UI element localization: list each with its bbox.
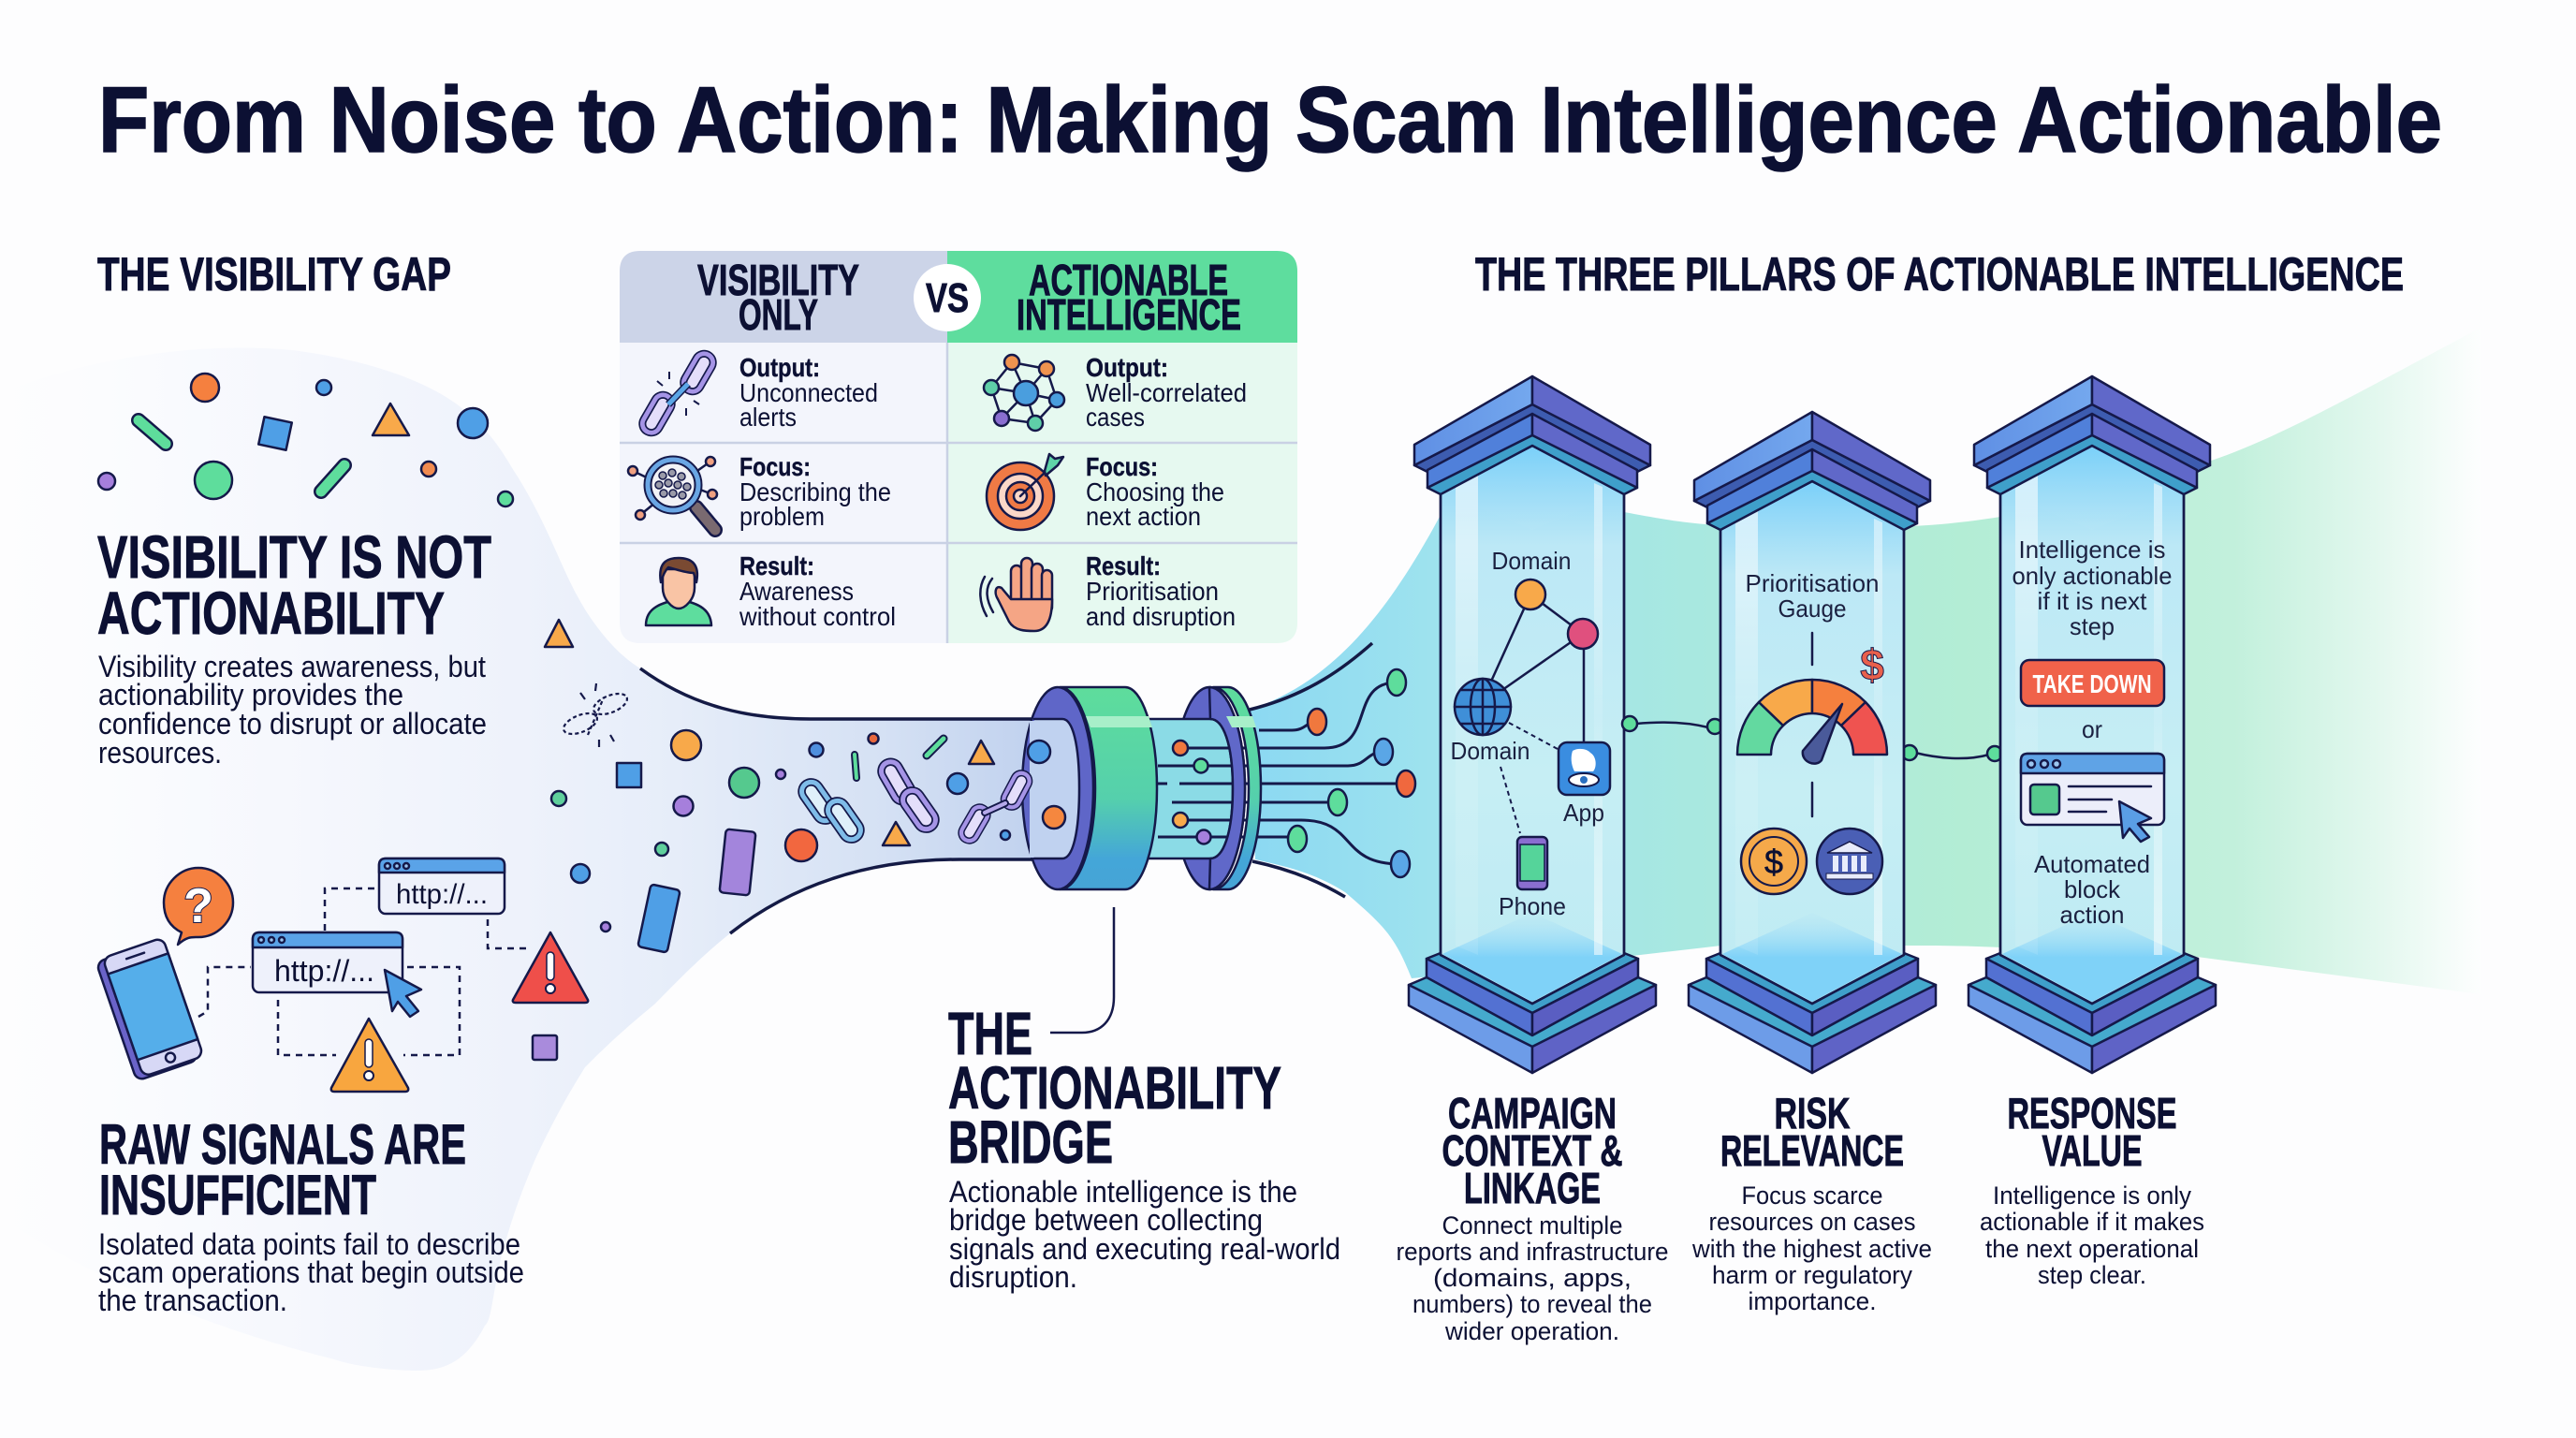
label: prioritisation gauge: Prioritisation xyxy=(1745,569,1880,597)
text: bridge description: Actionable intelligence is the xyxy=(949,1175,1297,1209)
button: take down: TAKE DOWN xyxy=(2033,669,2151,698)
text: campaign description: Connect multiple xyxy=(1442,1211,1623,1240)
heading: response value: RESPONSE xyxy=(2007,1089,2177,1137)
heading: the actionability bridge: BRIDGE xyxy=(948,1108,1113,1176)
panel: visibility vs actionable comparison xyxy=(620,251,1297,643)
icon: browser window front: http://... xyxy=(274,954,374,988)
scattered noise shapes xyxy=(98,374,1010,1060)
icon: question speech bubble xyxy=(164,868,233,945)
icon: browser window top xyxy=(379,858,505,914)
label: automated block action: Automated xyxy=(2034,850,2150,878)
heading: visibility is not actionability: VISIBILITY IS NOT xyxy=(97,523,491,591)
text: risk description: importance. xyxy=(1749,1287,1876,1315)
label: or: or xyxy=(2082,715,2102,743)
text: raw signals description: the transaction. xyxy=(98,1284,287,1317)
label: automated block action: action xyxy=(2059,901,2125,929)
pillar 1: campaign context and linkage xyxy=(1409,376,1656,1073)
heading: visibility is not actionability: ACTIONABILITY xyxy=(97,580,445,647)
text: risk description: resources on cases xyxy=(1709,1208,1915,1236)
label: phone: Phone xyxy=(1499,892,1566,920)
text: response description: the next operational xyxy=(1985,1235,2199,1263)
icon: browser window top: http://... xyxy=(396,879,488,910)
icon: browser window front xyxy=(253,932,402,992)
connections of entity graph xyxy=(1490,594,1584,833)
label: prioritisation gauge xyxy=(1745,569,1880,623)
icon: dollar sign: $ xyxy=(1860,640,1884,689)
label: prioritisation gauge: Gauge xyxy=(1778,594,1846,623)
panel: visibility vs actionable comparison: Focus: xyxy=(1086,452,1158,481)
tube outline xyxy=(640,643,1372,933)
panel: visibility vs actionable comparison: alerts xyxy=(739,403,797,432)
text: campaign description: numbers) to reveal the xyxy=(1412,1290,1652,1318)
panel: visibility vs actionable comparison: Focus: xyxy=(739,452,811,481)
text: bridge description: bridge between collecting xyxy=(949,1203,1263,1237)
icon: target with arrow xyxy=(987,454,1063,530)
icon: phone xyxy=(1517,837,1547,889)
chains inside tube xyxy=(798,758,939,844)
funnel: pale left noise field narrowing into tube xyxy=(0,347,1039,1371)
tube shapes near the ring xyxy=(959,741,1065,844)
connector between pillars 1 and 2 xyxy=(1622,716,1722,734)
text: visibility description: resources. xyxy=(98,736,222,770)
label: automated block action: block xyxy=(2064,875,2121,903)
text: raw signals description: scam operations that begin outside xyxy=(98,1255,524,1289)
icon: question speech bubble: ? xyxy=(183,879,213,933)
icon: bank xyxy=(1817,829,1882,894)
heading: raw signals are insufficient: INSUFFICIENT xyxy=(99,1164,376,1226)
heading: response value xyxy=(2007,1089,2177,1175)
heading: campaign context and linkage xyxy=(1442,1089,1623,1212)
panel: visibility vs actionable comparison: cases xyxy=(1086,403,1145,432)
heading: the actionability bridge: THE xyxy=(948,1000,1032,1067)
text: campaign description: (domains, apps, xyxy=(1433,1264,1632,1292)
text: bridge description: disruption. xyxy=(949,1260,1077,1294)
panel: visibility vs actionable comparison: Prioritisation xyxy=(1086,577,1219,606)
text: bridge description xyxy=(949,1175,1340,1294)
panel: visibility vs actionable comparison: Result: xyxy=(739,551,814,580)
panel: visibility vs actionable comparison: Awareness xyxy=(739,577,854,606)
panel: visibility vs actionable comparison: VS xyxy=(926,275,969,321)
text: intelligence next step: Intelligence is xyxy=(2018,536,2166,564)
icon: correlated network xyxy=(984,355,1064,431)
panel: visibility vs actionable comparison: problem xyxy=(739,502,825,531)
heading: response value: VALUE xyxy=(2042,1126,2142,1175)
text: risk description: Focus scarce xyxy=(1741,1181,1883,1210)
icon: person xyxy=(646,558,711,625)
icon: orange warning triangle xyxy=(331,1019,408,1092)
icon: automated block window xyxy=(2021,754,2164,842)
heading: the actionability bridge: ACTIONABILITY xyxy=(948,1054,1281,1122)
heading: campaign context and linkage: LINKAGE xyxy=(1464,1164,1601,1212)
flow: blue to green band behind pillars xyxy=(1250,328,2481,994)
icon: cursor arrow xyxy=(385,970,421,1017)
heading: risk relevance xyxy=(1720,1089,1904,1175)
text: campaign description: reports and infrastructure xyxy=(1397,1238,1668,1266)
connector line: bridge label xyxy=(1050,907,1114,1033)
icon: coin xyxy=(1741,829,1807,894)
panel: visibility vs actionable comparison: without control xyxy=(739,602,896,631)
heading: risk relevance: RISK xyxy=(1775,1089,1850,1137)
panel: visibility vs actionable comparison: Output: xyxy=(1086,353,1168,382)
icon: app xyxy=(1559,742,1610,795)
panel: visibility vs actionable comparison: INTELLIGENCE xyxy=(1017,290,1241,339)
panel: visibility vs actionable comparison: ONLY xyxy=(739,290,818,339)
label: domain: Domain xyxy=(1451,737,1530,765)
panel: visibility vs actionable comparison: and disruption xyxy=(1086,602,1236,631)
icon: smartphone xyxy=(95,937,204,1081)
icon: red warning triangle xyxy=(513,932,588,1003)
panel: visibility vs actionable comparison: Choosing the xyxy=(1086,477,1224,506)
text: response description xyxy=(1980,1181,2204,1289)
text: raw signals description: Isolated data points fail to describe xyxy=(98,1227,520,1261)
button: take down xyxy=(2021,660,2164,706)
heading: risk relevance: RELEVANCE xyxy=(1720,1126,1904,1175)
icon: gauge xyxy=(1737,633,1887,816)
text: response description: step clear. xyxy=(2038,1261,2146,1289)
text: intelligence next step xyxy=(2012,536,2172,640)
dashed connectors between raw signals xyxy=(198,888,526,1055)
panel: visibility vs actionable comparison: Output: xyxy=(739,353,820,382)
icon: broken chain xyxy=(639,350,716,436)
panel: visibility vs actionable comparison: Result: xyxy=(1086,551,1161,580)
text: response description: Intelligence is only xyxy=(1993,1181,2191,1210)
icon: coin: $ xyxy=(1764,843,1783,881)
text: visibility description xyxy=(98,650,487,770)
entity nodes xyxy=(1515,580,1598,649)
heading: the actionability bridge xyxy=(948,1000,1281,1176)
pillar 2: risk relevance xyxy=(1689,412,1936,1073)
text: raw signals description xyxy=(98,1227,524,1317)
text: risk description: harm or regulatory xyxy=(1712,1261,1912,1289)
icon: magnifier over cluster xyxy=(628,457,717,530)
heading: raw signals are insufficient: RAW SIGNALS ARE xyxy=(99,1113,466,1176)
icon: broken dashed chain xyxy=(561,683,630,747)
label: automated block action xyxy=(2034,850,2150,929)
section heading: the visibility gap: THE VISIBILITY GAP xyxy=(97,248,451,301)
panel: visibility vs actionable comparison: ACTIONABLE xyxy=(1029,256,1228,304)
text: intelligence next step: step xyxy=(2070,612,2115,640)
text: visibility description: actionability provides the xyxy=(98,678,403,712)
node: domain: Domain xyxy=(1492,547,1571,575)
text: risk description xyxy=(1691,1181,1932,1315)
icon: globe xyxy=(1455,679,1511,735)
heading: campaign context and linkage: CAMPAIGN xyxy=(1448,1089,1617,1137)
text: campaign description: wider operation. xyxy=(1444,1317,1619,1345)
panel: visibility vs actionable comparison: Unconnected xyxy=(739,378,878,407)
text: response description: actionable if it makes xyxy=(1980,1208,2204,1236)
text: intelligence next step: only actionable xyxy=(2012,562,2172,590)
text: intelligence next step: if it is next xyxy=(2037,587,2147,615)
panel: visibility vs actionable comparison: Describing the xyxy=(739,477,891,506)
heading: visibility is not actionability xyxy=(97,523,491,647)
panel: visibility vs actionable comparison: Well-correlated xyxy=(1086,378,1247,407)
heading: campaign context and linkage: CONTEXT & xyxy=(1442,1126,1623,1175)
text: visibility description: confidence to disrupt or allocate xyxy=(98,707,487,741)
text: risk description: with the highest active xyxy=(1691,1235,1932,1263)
text: campaign description xyxy=(1397,1211,1668,1345)
icon: raised stop hand xyxy=(980,558,1052,631)
heading: raw signals are insufficient xyxy=(99,1113,466,1226)
panel: visibility vs actionable comparison: next action xyxy=(1086,502,1201,531)
text: bridge description: signals and executing real-world xyxy=(949,1232,1340,1266)
actionability bridge rings and sorted signal lines xyxy=(1022,669,1415,889)
connector between pillars 2 and 3 xyxy=(1902,745,2002,761)
text: visibility description: Visibility creates awareness, but xyxy=(98,650,486,683)
panel: visibility vs actionable comparison: VISIBILITY xyxy=(697,256,859,304)
pillar 3: response value xyxy=(1969,376,2216,1073)
label: app: App xyxy=(1563,799,1604,827)
